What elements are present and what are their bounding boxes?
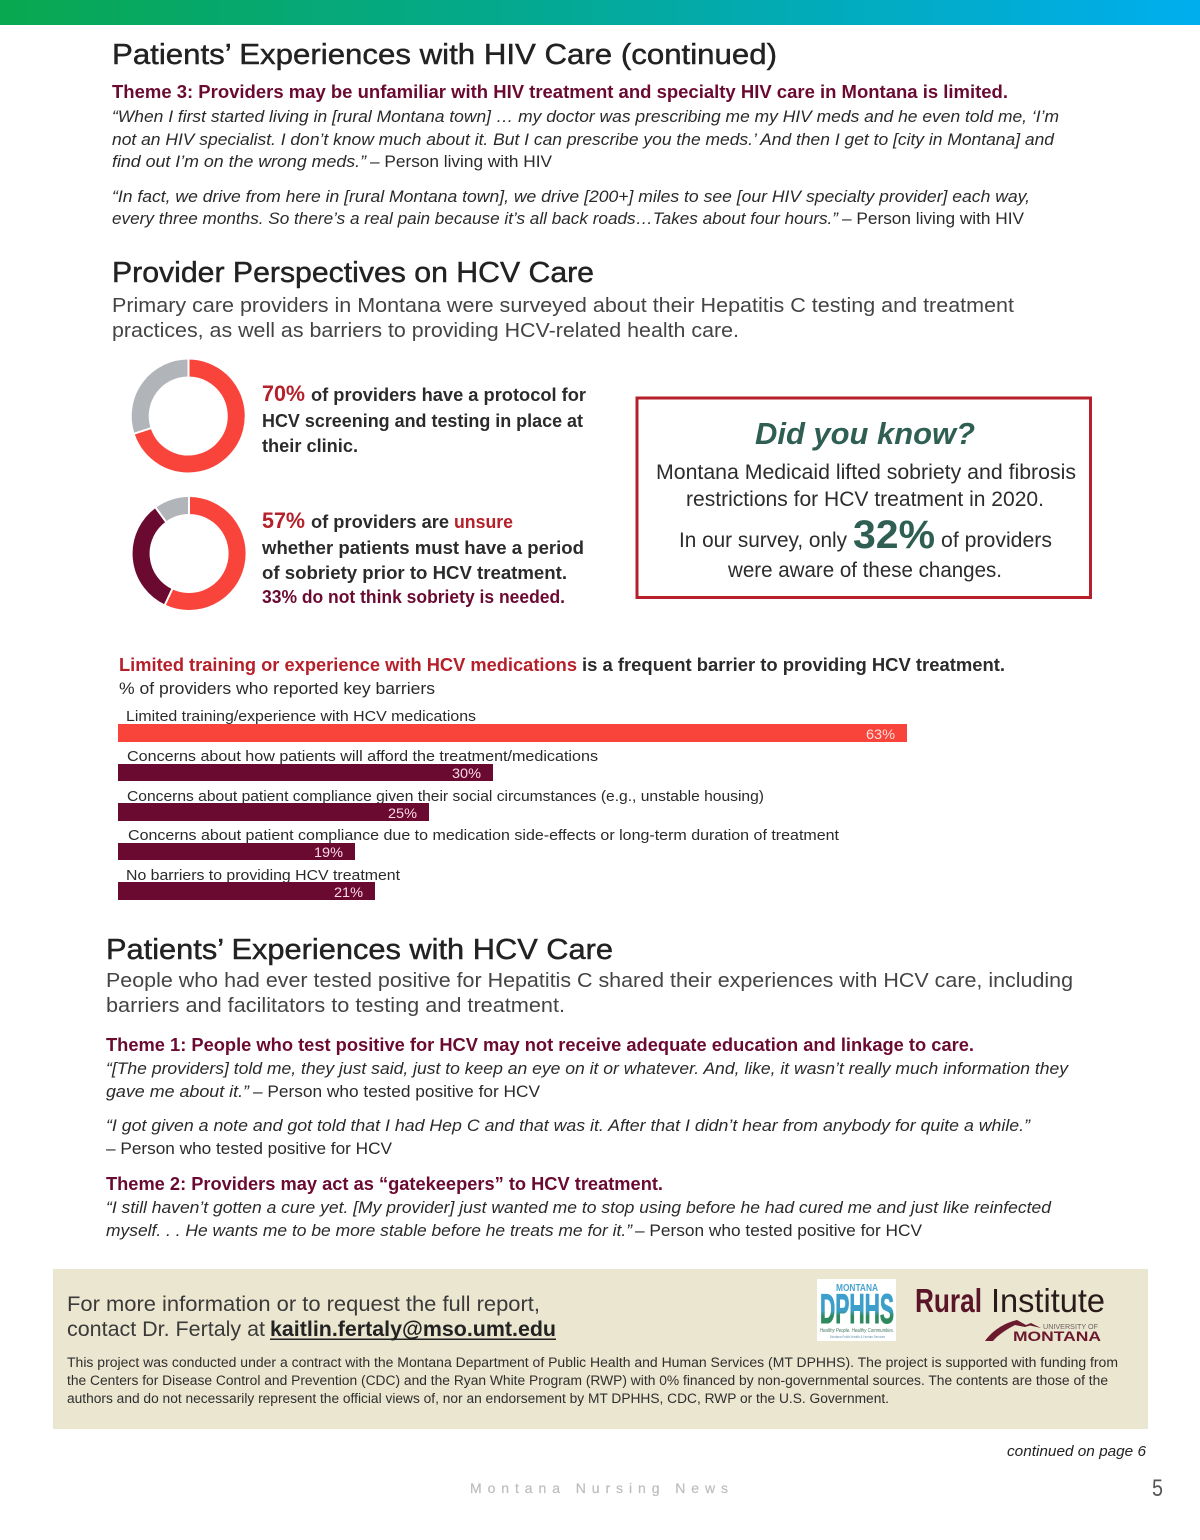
bar: side-effects 19% bbox=[118, 828, 839, 860]
logo: Montana DPHHS: Montana Public Health & Human Services bbox=[830, 1335, 885, 1339]
text block: HCV theme 1: “[The providers] told me, they just said, just to keep an eye on it or whatever. And, like, it wasn’t really much information they bbox=[106, 1059, 1070, 1078]
text block: HCV theme 1: – Person who tested positive for HCV bbox=[106, 1139, 393, 1158]
text block: HCV theme 2: myself. . . He wants me to be more stable before he treats me for it.” bbox=[106, 1221, 633, 1240]
funding disclaimer bbox=[67, 1355, 1118, 1406]
stat text: 70% of providers: of providers have a protocol for bbox=[311, 384, 586, 405]
top gradient band bbox=[0, 0, 1200, 25]
heading: Patients' Experiences with HIV Care (continued): Patients’ Experiences with HIV Care (continued) bbox=[112, 39, 777, 71]
bar: no barriers 21%: No barriers to providing HCV treatment bbox=[126, 868, 400, 884]
callout: Did you know?: of providers bbox=[941, 529, 1052, 552]
intro text: HCV experiences bbox=[106, 969, 1073, 1017]
heading: Patients' Experiences with HCV Care: Patients’ Experiences with HCV Care bbox=[106, 934, 613, 966]
intro text: provider survey bbox=[112, 294, 1014, 342]
bar: no barriers 21% bbox=[118, 868, 400, 900]
bar: social circumstances 25% bbox=[118, 789, 764, 821]
text block: theme 3 and quotes bbox=[112, 81, 1059, 228]
intro text: HCV experiences: barriers and facilitators to testing and treatment. bbox=[106, 994, 565, 1017]
intro text: provider survey: practices, as well as barriers to providing HCV-related health care. bbox=[112, 319, 739, 342]
bar: afford treatment 30% bbox=[118, 749, 598, 781]
callout heading: Did you know? bbox=[755, 416, 975, 451]
logo: Rural Institute University of Montana: Institute bbox=[991, 1282, 1105, 1319]
contact text: kaitlin.fertaly@mso.umt.edu bbox=[270, 1317, 556, 1341]
bar: side-effects 19%: Concerns about patient compliance due to medication side-effects or long-term duration of treatment bbox=[128, 828, 839, 844]
contact text: contact Dr. Fertaly at bbox=[67, 1317, 265, 1341]
bar chart: key barriers bbox=[118, 709, 907, 900]
quote 2 line 1: “In fact, we drive from here in [rural Montana town], we drive [200+] miles to see [our HIV specialty provider] each way, bbox=[112, 187, 1030, 206]
quote 1 line 3: find out I’m on the wrong meds.” bbox=[112, 152, 367, 171]
panel: footer contact bbox=[53, 1269, 1148, 1429]
funding disclaimer: the Centers for Disease Control and Prevention (CDC) and the Ryan White Program (RWP) with 0% financed by non-governmental sources. The contents are those of the bbox=[67, 1373, 1108, 1388]
heading: Provider Perspectives on HCV Care: Provider Perspectives on HCV Care bbox=[112, 257, 594, 289]
donut chart: 70% protocol bbox=[133, 358, 236, 464]
callout: Did you know?: In our survey, only bbox=[679, 529, 847, 552]
quote 2 attribution: – Person living with HIV bbox=[842, 209, 1025, 228]
stat text: 70% of providers: HCV screening and testing in place at bbox=[262, 410, 583, 431]
publication name: Montana Nursing News bbox=[470, 1480, 728, 1496]
bar chart heading: Limited training or experience with HCV medications bbox=[119, 654, 577, 675]
text block: HCV theme 1: – Person who tested positive for HCV bbox=[253, 1082, 541, 1101]
logo: Rural Institute University of Montana: Rural bbox=[915, 1282, 982, 1319]
text block: HCV theme 1: “I got given a note and got told that I had Hep C and that was it. After that I didn’t hear from anybody for quite a while.” bbox=[106, 1116, 1031, 1135]
donut chart: 57% unsure, 33% not needed bbox=[141, 496, 237, 606]
theme 3 heading: Theme 3: Providers may be unfamiliar with HIV treatment and specialty HIV care in Montana is limited. bbox=[112, 81, 1008, 102]
text block: HCV theme 2: – Person who tested positive for HCV bbox=[635, 1221, 923, 1240]
bar: limited training 63%: Limited training/experience with HCV medications bbox=[126, 709, 476, 725]
text block: HCV theme 2: “I still haven’t gotten a cure yet. [My provider] just wanted me to stop using before he had cured me and just like reinfected bbox=[106, 1198, 1052, 1217]
stat text: 57% of providers: of providers are bbox=[311, 511, 449, 532]
funding disclaimer: This project was conducted under a contract with the Montana Department of Public Health and Human Services (MT DPHHS). The project is supported with funding from bbox=[67, 1355, 1118, 1370]
quote 2 line 2: every three months. So there’s a real pain because it’s all back roads…Takes about four hours.” bbox=[112, 209, 839, 228]
logo: Montana DPHHS bbox=[817, 1279, 896, 1341]
contact text: For more information or to request the full report, bbox=[67, 1292, 540, 1316]
bar: social circumstances 25%: Concerns about patient compliance given their social circumstances (e.g., unstable housing) bbox=[127, 789, 764, 805]
logo: Montana DPHHS: DPHHS bbox=[820, 1285, 894, 1332]
stat text: 57% of providers: unsure bbox=[454, 511, 513, 532]
text block: HCV theme 2: Theme 2: Providers may act as “gatekeepers” to HCV treatment. bbox=[106, 1173, 663, 1194]
callout: Did you know?: restrictions for HCV treatment in 2020. bbox=[686, 488, 1044, 511]
bar: social circumstances 25%: 25% bbox=[388, 805, 417, 821]
stat text: 57% of providers bbox=[261, 508, 584, 607]
stat text: 57% of providers: 33% do not think sobriety is needed. bbox=[262, 586, 565, 607]
stat text: 57% of providers: of sobriety prior to HCV treatment. bbox=[262, 562, 567, 583]
logo: Rural Institute University of Montana bbox=[915, 1282, 1105, 1344]
bar: afford treatment 30%: Concerns about how patients will afford the treatment/medications bbox=[127, 749, 598, 765]
logo: Rural Institute University of Montana: UNIVERSITY OF bbox=[1043, 1322, 1098, 1331]
quote 1 attribution: – Person living with HIV bbox=[370, 152, 553, 171]
bar: afford treatment 30%: 30% bbox=[452, 765, 481, 781]
logo: Rural Institute University of Montana: MONTANA bbox=[1013, 1328, 1101, 1344]
bar chart heading: is a frequent barrier to providing HCV treatment. bbox=[582, 654, 1005, 675]
stat text: 70% of providers bbox=[262, 381, 586, 456]
intro text: HCV experiences: People who had ever tested positive for Hepatitis C shared their experiences with HCV care, including bbox=[106, 969, 1073, 992]
text block: HCV theme 1: gave me about it.” bbox=[106, 1082, 250, 1101]
callout stat: 32%: 32% bbox=[853, 513, 935, 557]
bar chart heading bbox=[119, 654, 1005, 698]
bar: no barriers 21%: 21% bbox=[334, 884, 363, 900]
intro text: provider survey: Primary care providers in Montana were surveyed about their Hepatitis C testing and treatment bbox=[112, 294, 1014, 317]
logo: Montana DPHHS: MONTANA bbox=[836, 1283, 878, 1294]
continued note: continued on page 6 bbox=[1007, 1443, 1147, 1460]
logo: Montana DPHHS: Healthy People. Healthy Communities. bbox=[820, 1328, 894, 1334]
contact text bbox=[67, 1292, 556, 1341]
stat text: 57% of providers: whether patients must have a period bbox=[261, 537, 584, 558]
text block: HCV theme 1 bbox=[106, 1034, 1070, 1158]
bar chart heading: % of providers who reported key barriers bbox=[119, 679, 435, 698]
callout: Did you know?: were aware of these changes. bbox=[727, 559, 1002, 582]
quote 1 line 1: “When I first started living in [rural Montana town] … my doctor was prescribing me my HIV meds and he even told me, ‘I’m bbox=[112, 107, 1059, 126]
stat text: 57% of providers: 57% bbox=[262, 508, 305, 533]
funding disclaimer: authors and do not necessarily represent the official views of, nor an endorsement by MT DPHHS, CDC, RWP or the U.S. Government. bbox=[67, 1391, 889, 1406]
text block: HCV theme 1: Theme 1: People who test positive for HCV may not receive adequate education and linkage to care. bbox=[106, 1034, 974, 1055]
callout body: Montana Medicaid lifted sobriety and fibrosis bbox=[656, 461, 1076, 484]
text block: HCV theme 2 bbox=[106, 1173, 1052, 1240]
bar: limited training 63% bbox=[118, 709, 907, 742]
stat text: 70% of providers: 70% bbox=[262, 381, 305, 406]
quote 1 line 2: not an HIV specialist. I don’t know much about it. But I can prescribe you the meds.’ And then I get to [city in Montana] and bbox=[112, 130, 1055, 149]
callout: Did you know? bbox=[637, 398, 1090, 598]
page number: 5 bbox=[1152, 1475, 1163, 1502]
bar: limited training 63%: 63% bbox=[866, 726, 895, 742]
stat text: 70% of providers: their clinic. bbox=[262, 435, 358, 456]
bar: side-effects 19%: 19% bbox=[314, 844, 343, 860]
